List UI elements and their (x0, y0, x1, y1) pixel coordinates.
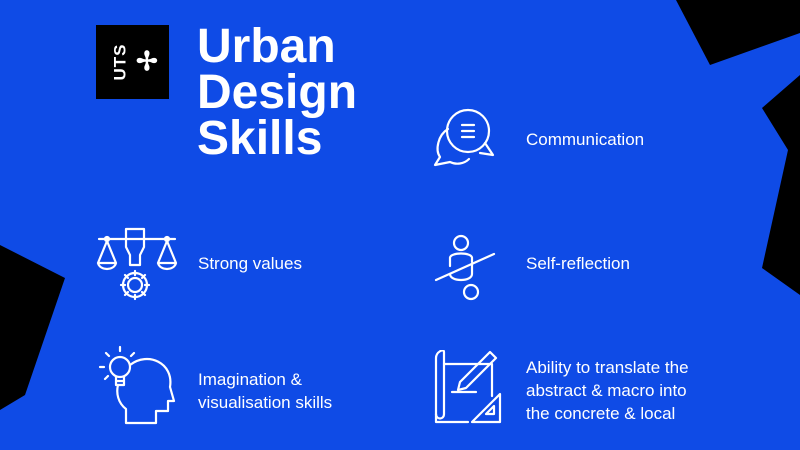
logo: UTS (110, 44, 130, 80)
label: ability: Ability to translate the (526, 358, 689, 377)
logo: ✢ (136, 46, 158, 76)
icon: strong values (96, 228, 178, 300)
label: strong values: Strong values (198, 254, 302, 273)
title: Urban (197, 20, 336, 73)
title (197, 20, 357, 165)
label: communication: Communication (526, 130, 644, 149)
label: ability (526, 358, 689, 423)
label: ability: abstract & macro into (526, 381, 687, 400)
logo (96, 25, 169, 99)
label: imagination: Imagination & (198, 370, 302, 389)
title: Skills (197, 112, 322, 165)
label: imagination: visualisation skills (198, 393, 332, 412)
label: ability: the concrete & local (526, 404, 675, 423)
icon: communication (434, 108, 494, 166)
title: Design (197, 66, 357, 119)
icon: blueprint (434, 350, 502, 424)
label: imagination (198, 370, 332, 412)
icon: self-reflection (434, 234, 496, 300)
icon: imagination (98, 346, 176, 424)
label: self-reflection: Self-reflection (526, 254, 630, 273)
